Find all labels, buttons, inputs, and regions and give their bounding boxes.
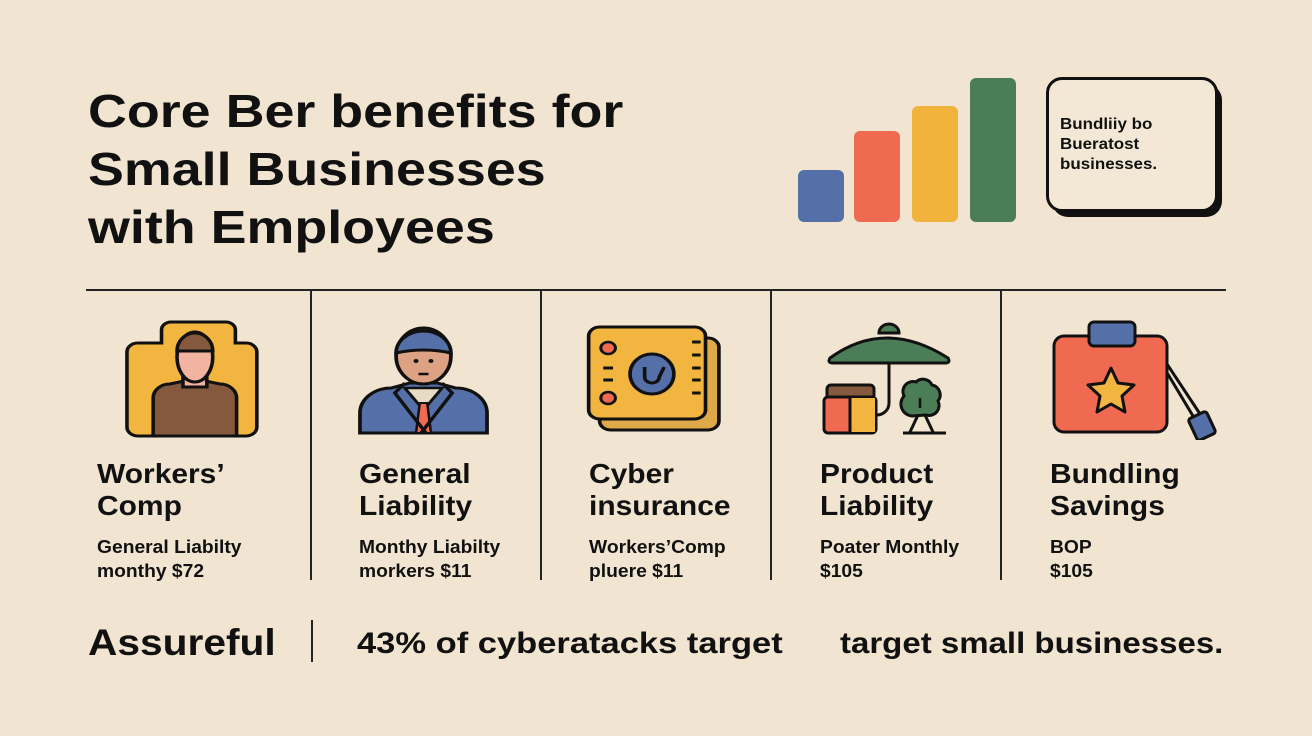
- heading: general liability: Liability: [359, 490, 472, 521]
- title: Small Businesses: [88, 143, 546, 195]
- text: workers comp detail: [97, 537, 242, 581]
- title: with Employees: [88, 201, 495, 253]
- text: general liability detail: Monthy Liabilty: [359, 537, 500, 557]
- heading: product liability: Liability: [820, 490, 933, 521]
- heading: product liability: [820, 458, 933, 521]
- heading: bundling savings: Savings: [1050, 490, 1165, 521]
- heading: general liability: General: [359, 458, 471, 489]
- callout box: Bundliiy bo: [1060, 116, 1152, 133]
- title: Core Ber benefits for: [88, 85, 623, 137]
- heading: bundling savings: [1050, 458, 1180, 521]
- footer stat: 43% of cyberatacks target: [357, 627, 783, 660]
- text: bundling detail: [1050, 537, 1093, 581]
- heading: workers comp: Comp: [97, 490, 182, 521]
- text: bundling detail: BOP: [1050, 537, 1092, 557]
- text: bundling detail: $105: [1050, 561, 1093, 581]
- icon: bag with star: [1052, 320, 1217, 440]
- footer brand: Assureful: [88, 622, 276, 663]
- icon: worker: [125, 320, 259, 438]
- icon: cyber card: [586, 326, 721, 432]
- text: product detail: [820, 537, 959, 581]
- callout box: businesses.: [1060, 156, 1157, 173]
- callout box: Bueratost: [1060, 136, 1139, 153]
- text: cyber detail: pluere $11: [589, 561, 683, 581]
- title: [88, 85, 623, 253]
- heading: product liability: Product: [820, 458, 933, 489]
- heading: cyber insurance: Cyber: [589, 458, 674, 489]
- heading: workers comp: [97, 458, 225, 521]
- text: cyber detail: [589, 537, 726, 581]
- icon: umbrella stall: [822, 322, 950, 434]
- heading: cyber insurance: insurance: [589, 490, 731, 521]
- text: product detail: Poater Monthly: [820, 537, 959, 557]
- heading: general liability: [359, 458, 472, 521]
- callout box: [1046, 77, 1222, 217]
- heading: bundling savings: Bundling: [1050, 458, 1180, 489]
- text: general liability detail: [359, 537, 500, 581]
- footer stat continuation: target small businesses.: [840, 627, 1223, 660]
- text: product detail: $105: [820, 561, 863, 581]
- heading: cyber insurance: [589, 458, 731, 521]
- text: general liability detail: morkers $11: [359, 561, 471, 581]
- text: workers comp detail: monthy $72: [97, 561, 204, 581]
- icon: businessman: [358, 326, 489, 434]
- text: cyber detail: Workers’Comp: [589, 537, 726, 557]
- bar chart: [798, 78, 1016, 222]
- heading: workers comp: Workers’: [97, 458, 225, 489]
- text: workers comp detail: General Liabilty: [97, 537, 242, 557]
